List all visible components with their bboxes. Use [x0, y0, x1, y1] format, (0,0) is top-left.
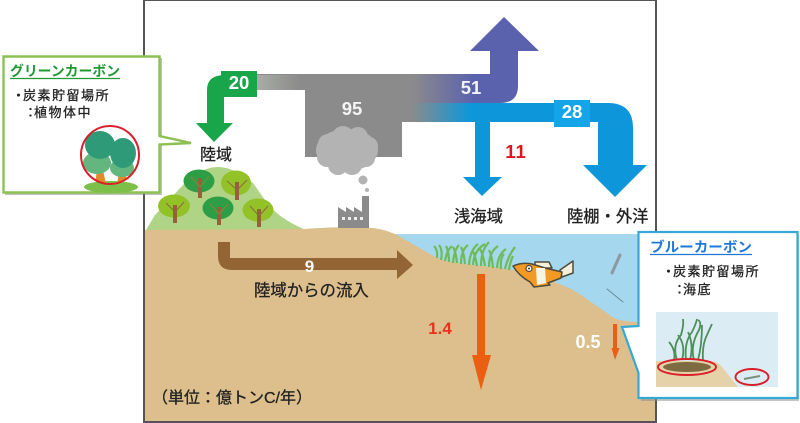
unit note: （単位：億トンC/年） — [152, 389, 312, 407]
label: shallow sea: 浅海域 — [454, 208, 503, 226]
value box 28 — [554, 100, 590, 127]
value 51: 51 — [461, 77, 481, 98]
text: storage location — [662, 264, 760, 297]
panel: blue carbon callout — [622, 232, 799, 401]
text: storage location: ： — [673, 282, 688, 297]
orange arrow: sediment 1.4 — [472, 274, 491, 390]
brown arrow: inflow from land — [218, 242, 413, 279]
tree 5 — [242, 198, 274, 227]
plankton debris — [607, 255, 623, 302]
text: storage location: 炭素貯留場所 — [23, 88, 110, 103]
text: storage location: 海底 — [683, 282, 712, 297]
blue arrow: to shelf and open ocean — [412, 103, 647, 197]
label: land: 陸域 — [200, 146, 232, 164]
blue arrow: to shallow sea — [463, 120, 502, 196]
heading: green carbon: グリーンカーボン — [10, 63, 120, 79]
water: shallow sea and ocean — [392, 234, 655, 335]
text: storage location: 炭素貯留場所 — [673, 264, 760, 279]
land — [145, 227, 655, 421]
diagram frame — [144, 0, 656, 422]
green arrow: to land — [196, 71, 233, 142]
text: storage location: ： — [24, 105, 39, 120]
seagrass — [669, 319, 712, 360]
text: storage location — [12, 88, 110, 120]
factory — [338, 196, 369, 228]
label: inflow from land: 陸域からの流入 — [254, 282, 369, 300]
panel: green carbon callout — [4, 56, 191, 195]
text: storage location: ・ — [662, 264, 677, 279]
text: storage location: 植物体中 — [34, 105, 92, 120]
tree 4 — [202, 196, 234, 225]
tree 3 — [158, 194, 190, 223]
icon: circled trees — [81, 126, 139, 193]
seagrass — [434, 242, 515, 270]
orange arrow: sediment 0.5 — [612, 324, 620, 360]
value box 20: 20 — [229, 72, 249, 93]
value 0.5: 0.5 — [575, 332, 601, 352]
value 95: 95 — [342, 98, 362, 119]
value 1.4: 1.4 — [428, 319, 452, 338]
tree 2 — [221, 170, 251, 200]
tree 1 — [184, 170, 214, 198]
text: storage location: ・ — [12, 88, 27, 103]
heading: blue carbon: ブルーカーボン — [650, 239, 752, 255]
label: shelf and open ocean: 陸棚・外洋 — [567, 208, 648, 226]
value box 20 — [221, 71, 257, 97]
fish — [513, 261, 573, 287]
purple arrow: release to atmosphere 51 — [412, 17, 539, 103]
value 11: 11 — [505, 141, 527, 162]
value box 28: 28 — [562, 101, 582, 122]
gray emissions flow 95 — [257, 74, 414, 157]
seabed illustration — [656, 312, 778, 387]
value 9: 9 — [305, 257, 314, 276]
hill with trees — [146, 167, 305, 230]
smoke cloud — [316, 126, 378, 192]
